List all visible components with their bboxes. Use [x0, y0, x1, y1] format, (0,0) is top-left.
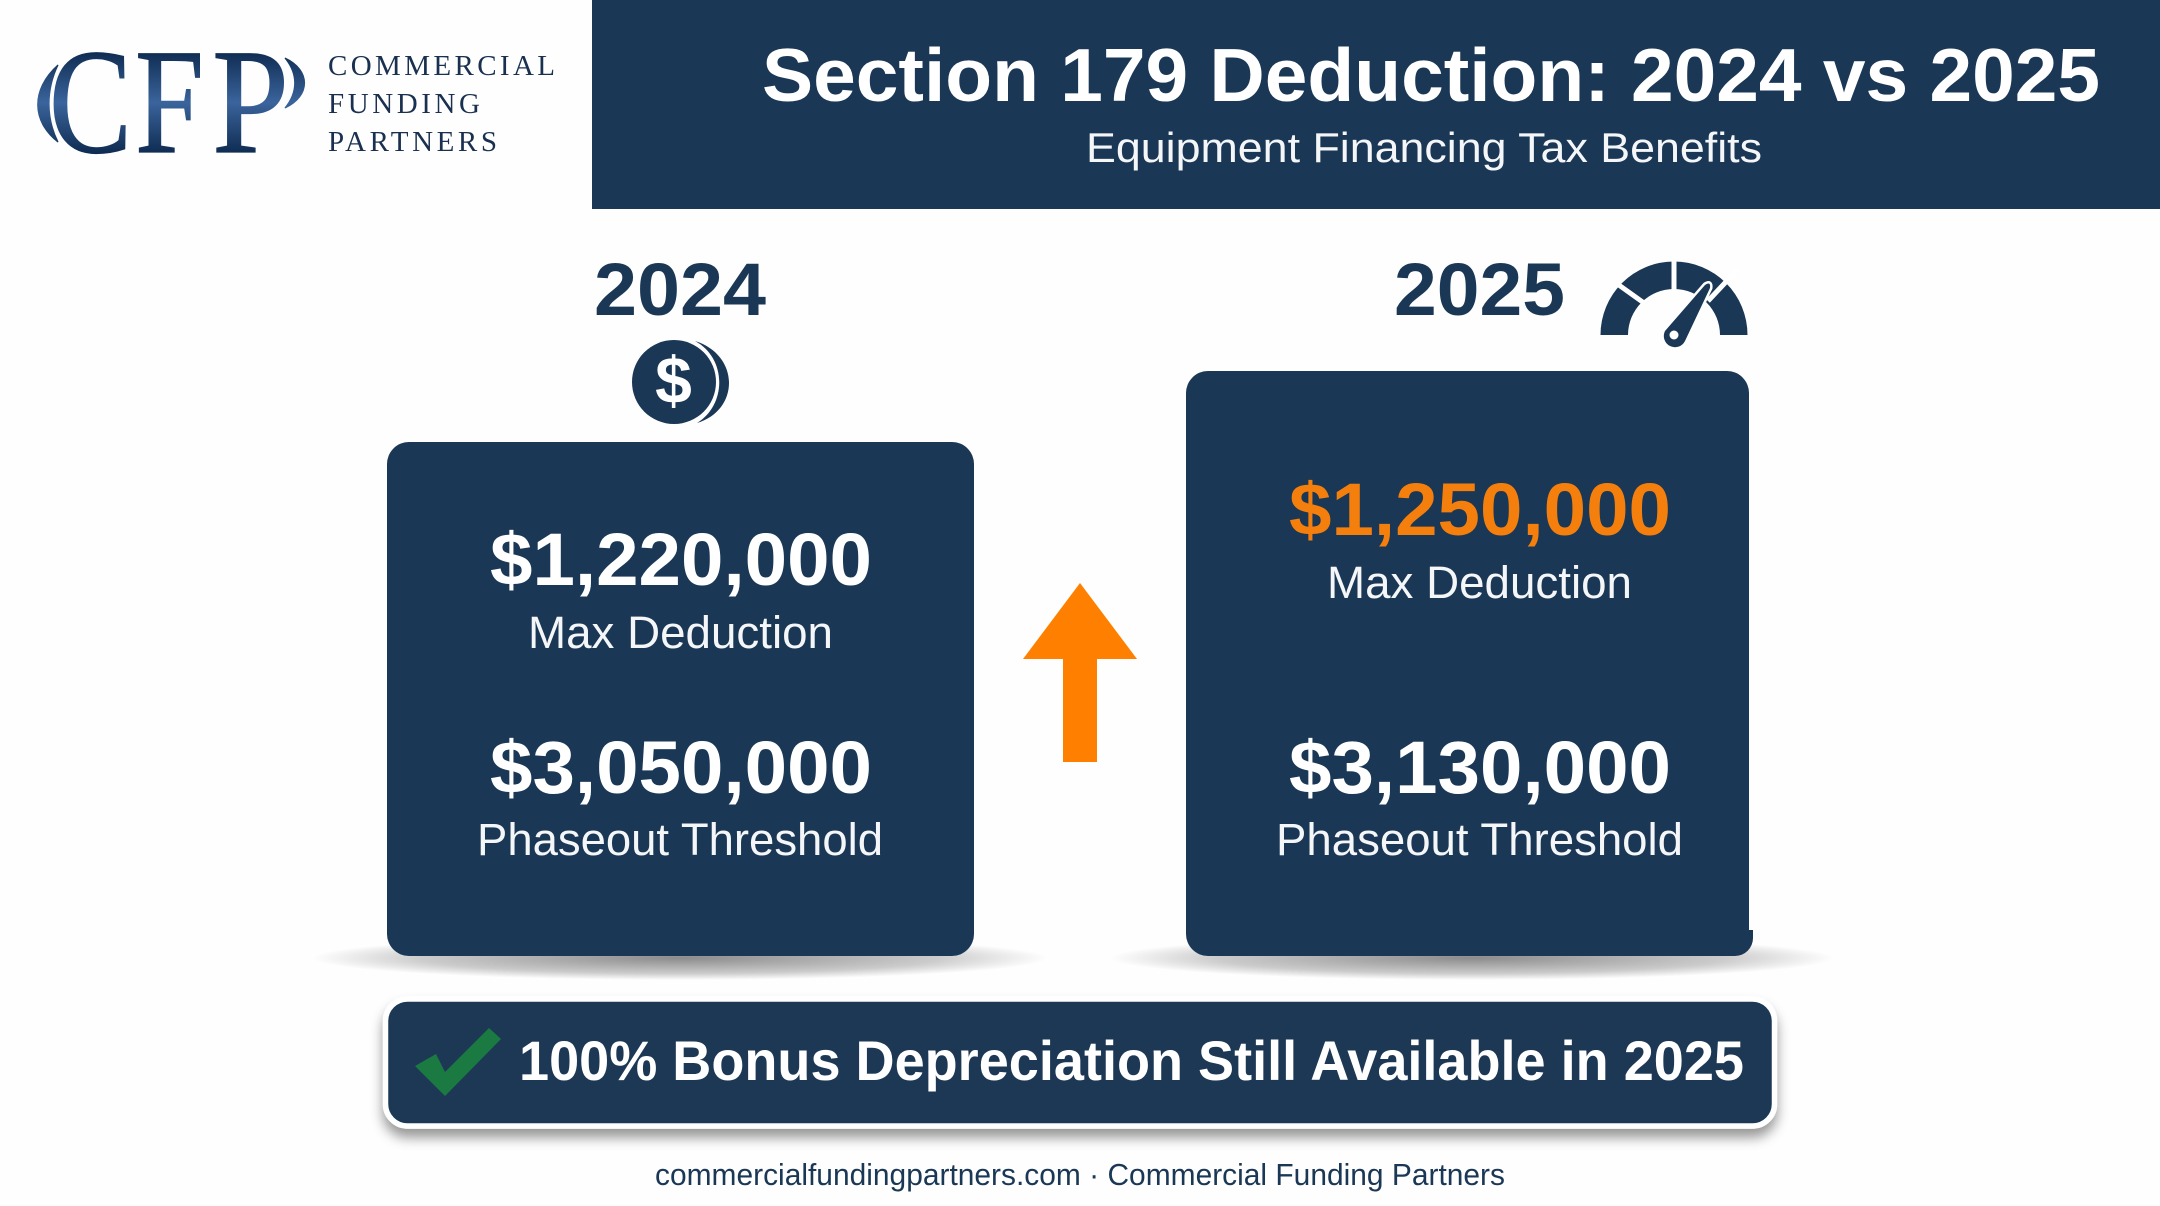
footer: website and company: commercialfundingpartners.com · Commercial Funding Partners [655, 1157, 1505, 1192]
icon: speedometer gauge [1600, 255, 1748, 347]
logo mark: CFP monogram: P [212, 19, 289, 185]
arrow: increase [1023, 583, 1137, 762]
logo wordmark: FUNDING [328, 88, 480, 120]
logo wordmark: PARTNERS [328, 126, 497, 158]
heading: 2025: 2025 [1394, 248, 1565, 331]
title: Section 179 Deduction: 2024 vs 2025 [762, 33, 2100, 117]
panel: 2024 [387, 442, 974, 956]
logo wordmark [328, 50, 555, 158]
panel: 2025 [1186, 371, 1753, 956]
2025 phaseout label: Phaseout Threshold [1276, 814, 1683, 865]
2024 phaseout label: Phaseout Threshold [477, 814, 883, 865]
2024 max deduction value: $1,220,000 [490, 518, 872, 601]
subtitle: Equipment Financing Tax Benefits [1086, 124, 1762, 171]
icon: dollar coin [632, 340, 729, 424]
logo wordmark: COMMERCIAL [328, 50, 555, 82]
2025 max deduction label: Max Deduction [1327, 557, 1632, 608]
logo: Commercial Funding Partners [38, 19, 555, 185]
header band [592, 0, 2160, 209]
banner: bonus depreciation [386, 999, 1774, 1126]
logo mark: CFP monogram [38, 19, 305, 185]
logo mark: CFP monogram: C [49, 19, 132, 185]
heading: 2024: 2024 [594, 248, 766, 331]
banner text: 100% Bonus Depreciation Still Available in 2025 [519, 1029, 1744, 1092]
2025 phaseout value: $3,130,000 [1289, 726, 1671, 809]
icon: green check mark [415, 1028, 501, 1096]
icon: dollar coin: $ [655, 343, 692, 417]
logo mark: CFP monogram: F [135, 19, 204, 185]
shadow under 2024 card [312, 936, 1048, 980]
2024 max deduction label: Max Deduction [528, 607, 833, 658]
2024 phaseout value: $3,050,000 [490, 726, 872, 809]
shadow under 2025 card [1110, 936, 1834, 980]
2025 max deduction value: $1,250,000 [1289, 468, 1671, 551]
